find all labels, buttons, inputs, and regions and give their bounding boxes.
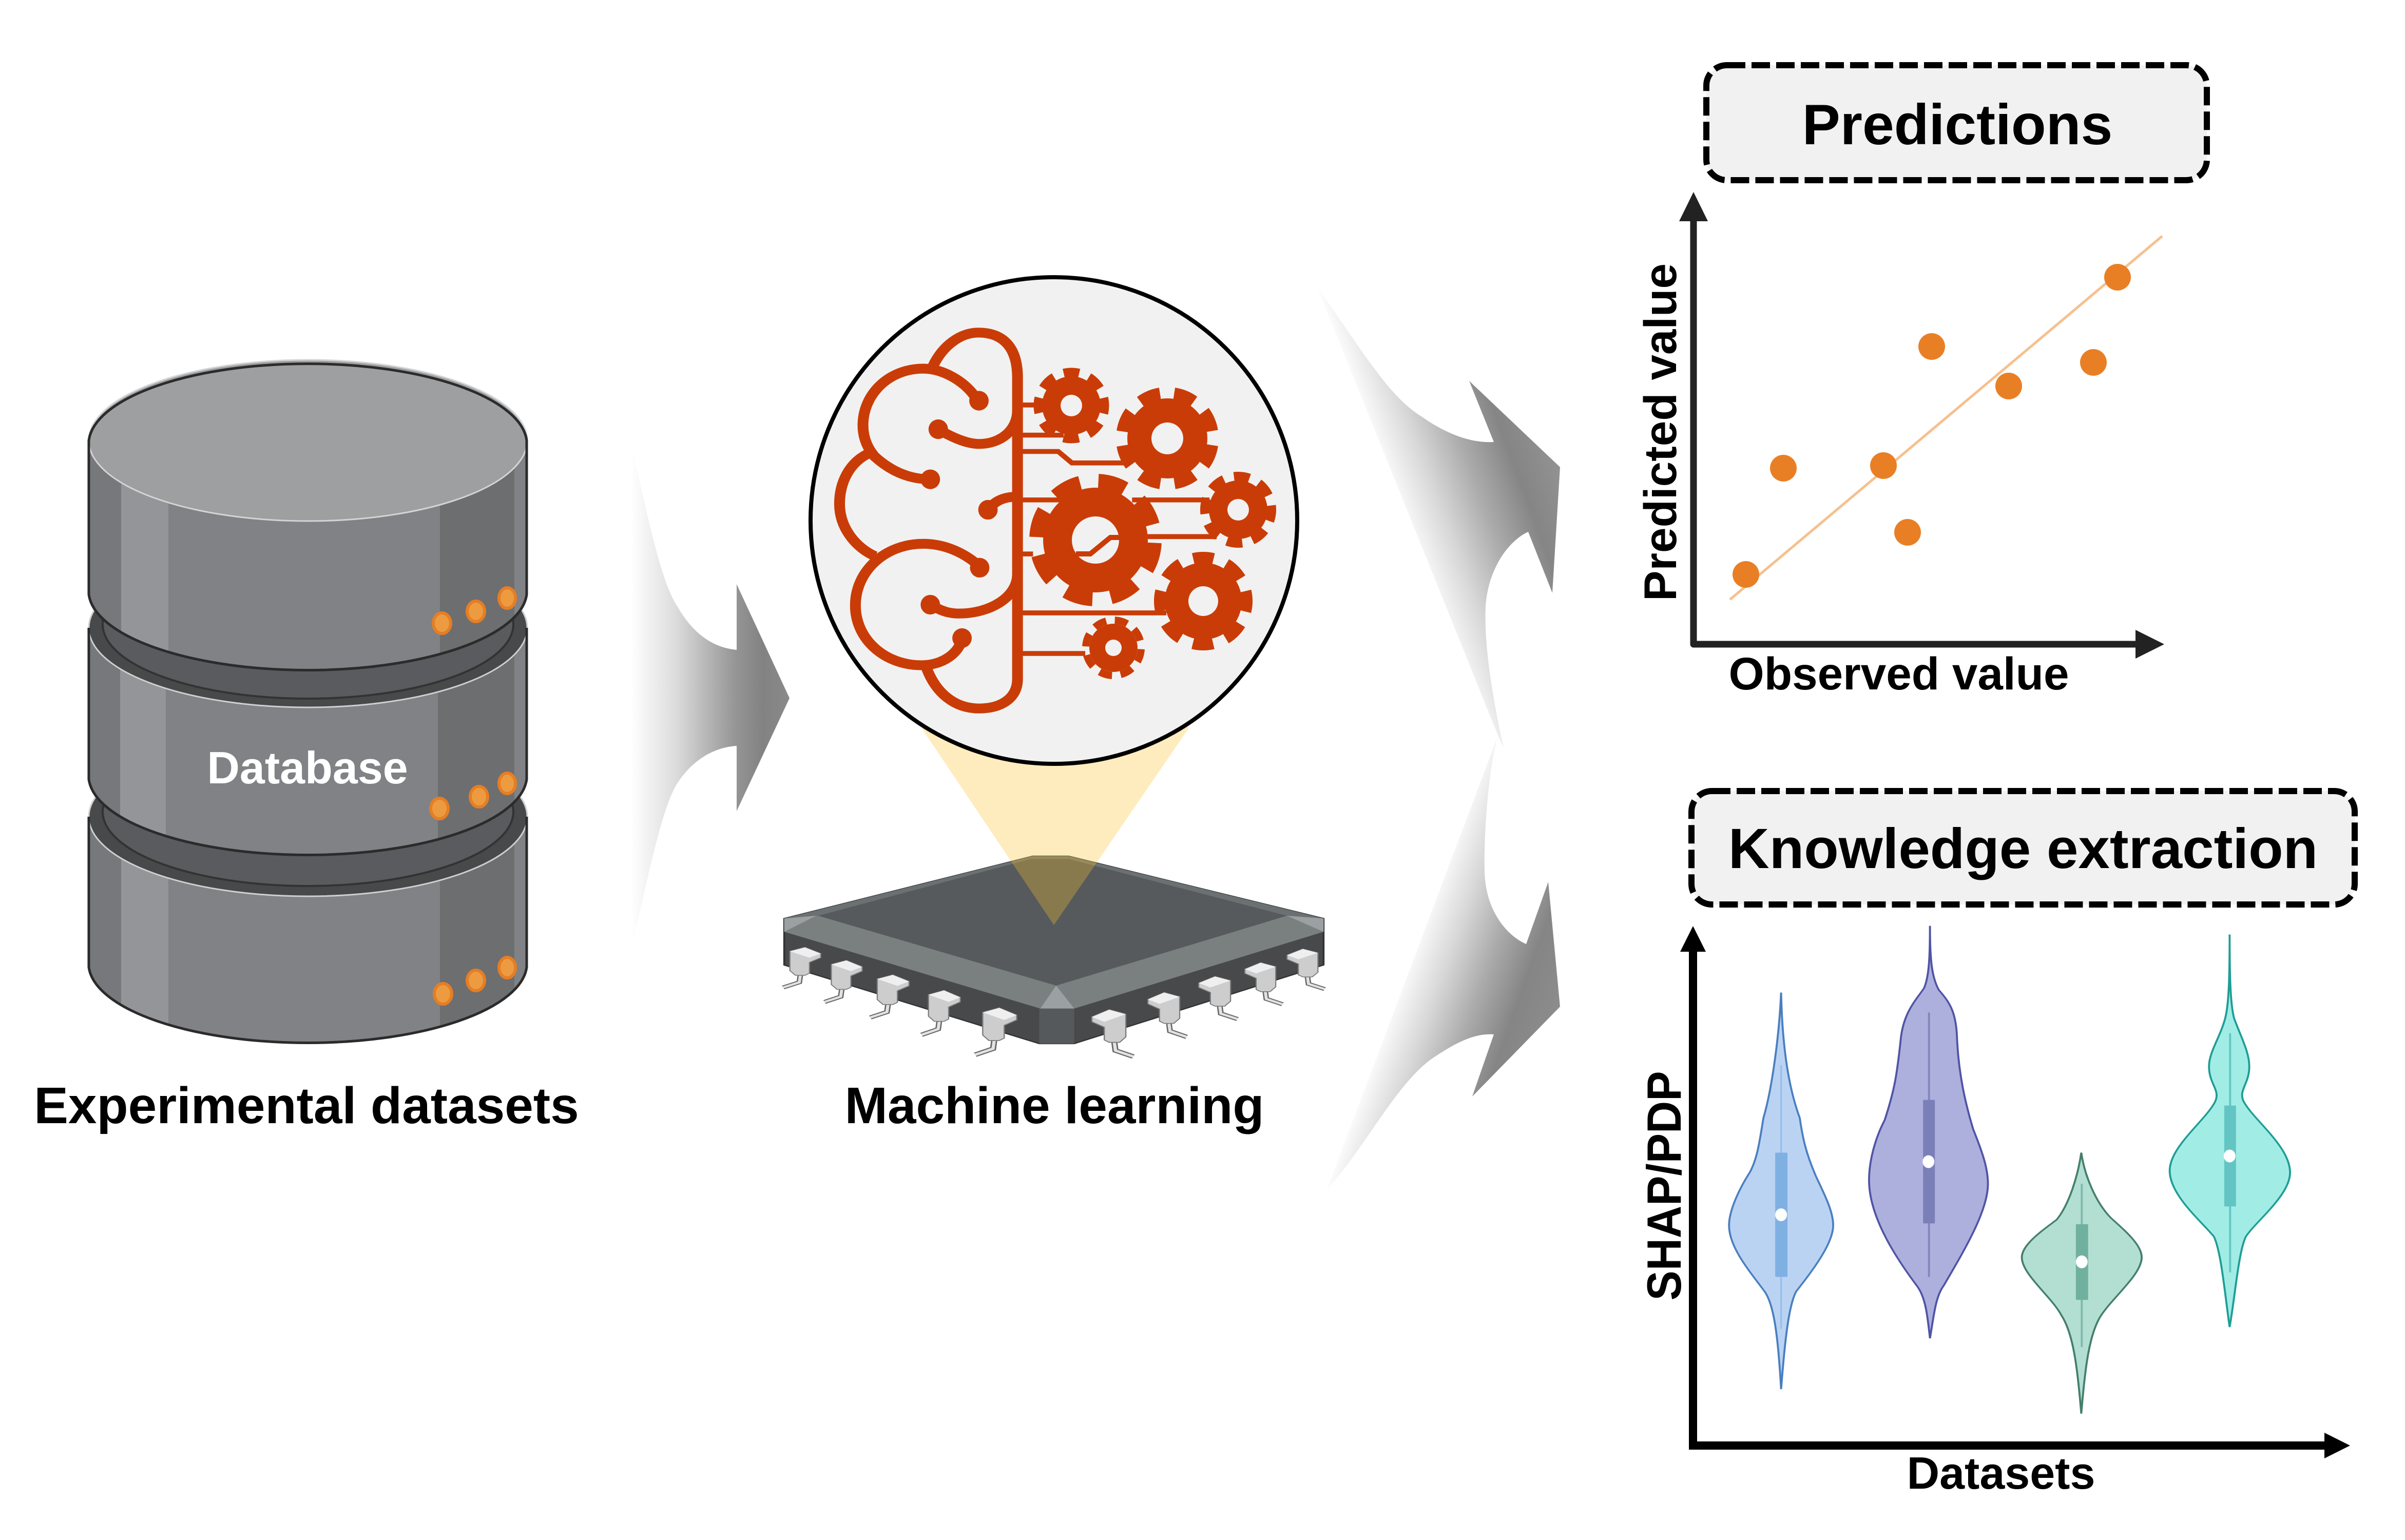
brain outline xyxy=(839,333,1017,708)
violin plot: SHAP/PDP by dataset xyxy=(1637,926,2350,1498)
circle background xyxy=(811,277,1297,764)
heading box: predictions xyxy=(1706,65,2207,180)
violin y axis label: SHAP/PDP xyxy=(1637,1071,1691,1301)
microchip xyxy=(783,856,1325,1056)
gear 6 xyxy=(1084,619,1143,677)
violin axes xyxy=(1680,926,2350,1458)
chip pins xyxy=(783,948,1325,1056)
database icon xyxy=(87,359,529,1078)
database bottom disk xyxy=(87,797,528,1044)
violin 1 blue xyxy=(1729,993,1833,1389)
database label: Database xyxy=(207,742,408,793)
circuit traces xyxy=(1022,405,1217,653)
label: machine learning: Machine learning xyxy=(845,1077,1264,1134)
label: experimental datasets: Experimental datasets xyxy=(34,1077,579,1134)
arrow: database to machine learning xyxy=(632,449,790,944)
violin x axis label: Datasets xyxy=(1907,1448,2095,1498)
heading box: predictions: Predictions xyxy=(1802,93,2112,157)
violin 2 purple xyxy=(1869,926,1988,1338)
heading box: knowledge extraction: Knowledge extraction xyxy=(1728,817,2318,880)
gear 5 xyxy=(1151,549,1256,653)
arrow: machine learning to predictions xyxy=(1317,287,1560,748)
chip body xyxy=(784,856,1323,1044)
violin 3 green xyxy=(2022,1152,2142,1414)
circle panel: AI brain xyxy=(811,277,1297,764)
projection cone from chip to circle xyxy=(921,616,1189,925)
regression line xyxy=(1730,236,2162,600)
data points xyxy=(1733,264,2131,588)
gear 1 xyxy=(1031,365,1111,446)
database indicator lights xyxy=(431,588,515,1004)
violins xyxy=(1729,926,2290,1414)
x axis label: Observed value xyxy=(1729,648,2069,699)
violin 4 teal xyxy=(2170,935,2290,1327)
database middle disk xyxy=(87,610,528,856)
gear 3 large xyxy=(1034,478,1157,602)
scatter axes xyxy=(1679,192,2164,659)
gear 2 xyxy=(1115,387,1219,490)
y axis label: Predicted value xyxy=(1634,263,1686,601)
database top disk xyxy=(87,359,528,671)
heading box: knowledge extraction xyxy=(1691,791,2355,904)
gear 4 xyxy=(1201,473,1275,547)
scatter plot: predicted vs observed xyxy=(1634,192,2164,699)
arrow: machine learning to knowledge extraction xyxy=(1327,737,1560,1189)
